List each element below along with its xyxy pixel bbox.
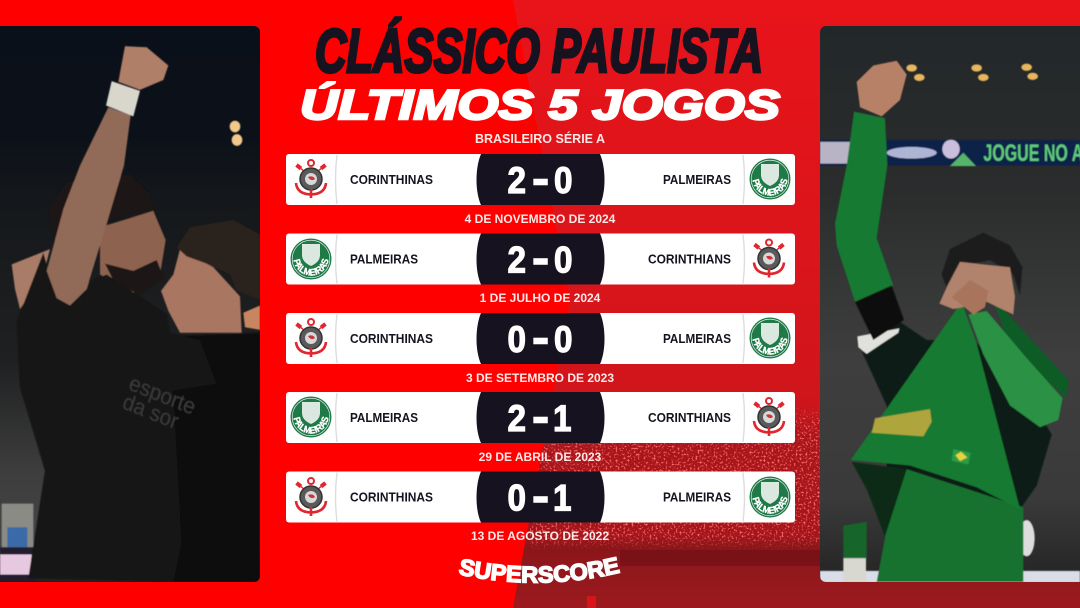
match row 3: PALMEIRAS — [663, 332, 731, 346]
match row 2: 2 — [508, 240, 526, 280]
fist — [857, 61, 907, 116]
match row 1: PALMEIRAS — [663, 173, 731, 187]
crest: Palmeiras: PALMEIRAS — [293, 258, 328, 276]
armband — [855, 285, 904, 340]
hand — [952, 280, 988, 315]
match row 5: – — [535, 488, 546, 510]
subtitle: Últimos 5 jogos: ÚLTIMOS 5 JOGOS — [300, 81, 780, 128]
match row 1: 2 — [508, 160, 526, 201]
raised arm — [835, 112, 893, 302]
advertising board — [0, 504, 37, 582]
jersey of player two — [170, 333, 260, 582]
left photo: Corinthians players — [0, 26, 260, 582]
score — [476, 234, 604, 284]
match row 5: CORINTHINAS — [350, 490, 433, 504]
player two face — [161, 249, 242, 333]
logo: Superscore: SUPERSCORE — [458, 556, 620, 584]
match row 2: – — [535, 250, 546, 272]
crest: Corinthians — [296, 160, 326, 198]
score — [476, 392, 604, 443]
date 2: 1 DE JULHO DE 2024 — [480, 291, 601, 305]
match row 3 — [286, 313, 795, 364]
crest: Palmeiras — [750, 318, 790, 358]
head hair — [942, 233, 1022, 295]
player one beard — [105, 260, 164, 295]
dark undershirt — [857, 322, 1052, 509]
match row 3: 0 — [554, 319, 572, 360]
match row 4 — [286, 392, 795, 443]
sponsor lettering — [123, 379, 195, 428]
player two hand — [243, 305, 260, 330]
match row 4: CORINTHIANS — [648, 411, 731, 425]
fist — [118, 46, 168, 90]
right arm — [968, 311, 1063, 427]
shirt right fold — [995, 306, 1069, 398]
player one jersey — [17, 253, 217, 582]
match row 5 — [286, 472, 795, 522]
score — [476, 154, 604, 205]
match row 5: PALMEIRAS — [663, 490, 731, 504]
crest: Palmeiras: PALMEIRAS — [293, 416, 328, 434]
wristband — [106, 81, 140, 116]
competition label: BRASILEIRO SÉRIE A — [475, 131, 605, 146]
match row 2: PALMEIRAS — [350, 252, 418, 266]
match row 1 — [286, 154, 795, 205]
stadium lights — [230, 121, 242, 146]
match row 4: 2 — [508, 398, 526, 439]
left hand on shoulder — [12, 249, 50, 309]
sponsor — [872, 409, 932, 436]
match row 1: 0 — [554, 160, 572, 201]
match row 4: 1 — [553, 398, 572, 439]
pulled shirt — [851, 302, 1020, 509]
white trim — [857, 328, 899, 354]
match row 5: 1 — [553, 478, 572, 518]
date 3: 3 DE SETEMBRO DE 2023 — [466, 371, 614, 385]
bottom board and background figures — [820, 520, 1080, 583]
face — [939, 262, 1015, 315]
match row 3: CORINTHINAS — [350, 332, 433, 346]
brazil patch — [952, 449, 971, 464]
match row 4: PALMEIRAS — [350, 411, 418, 425]
match row 4: – — [535, 408, 546, 430]
sponsor lettering: da sor — [120, 388, 182, 434]
player one hair — [54, 175, 154, 240]
crowd texture on lower right of background — [530, 405, 830, 608]
shirt shadow below hem — [852, 462, 907, 536]
date 5: 13 DE AGOSTO DE 2022 — [471, 529, 609, 543]
LED board — [820, 139, 1080, 166]
raised forearm — [47, 107, 131, 305]
crest: Palmeiras — [290, 238, 332, 280]
crest: Palmeiras: PALMEIRAS — [752, 178, 788, 196]
right photo: Palmeiras player — [820, 26, 1080, 583]
crest: Corinthians — [754, 240, 784, 278]
match row 3: – — [535, 330, 546, 352]
stadium lights — [906, 64, 1038, 81]
match row 1: – — [535, 170, 546, 192]
crest: Palmeiras — [750, 476, 790, 518]
crest: Palmeiras: PALMEIRAS — [752, 496, 788, 514]
title: Clássico Paulista: CLÁSSICO PAULISTA — [315, 17, 763, 85]
date 1: 4 DE NOVEMBRO DE 2024 — [465, 212, 616, 226]
score — [476, 472, 604, 522]
match row 2 — [286, 234, 795, 284]
player two hair — [177, 220, 260, 300]
crest: Palmeiras — [750, 158, 790, 200]
date 4: 29 DE ABRIL DE 2023 — [479, 450, 602, 464]
match row 1: CORINTHINAS — [350, 173, 433, 187]
crest: Corinthians — [296, 319, 326, 357]
score — [476, 313, 604, 364]
crest: Corinthians — [296, 478, 326, 516]
match row 5: 0 — [508, 478, 526, 518]
match row 2: CORINTHIANS — [648, 252, 731, 266]
crest: Palmeiras — [290, 396, 332, 438]
sponsor lettering: esporte — [126, 369, 199, 420]
player one face — [100, 211, 166, 293]
crest: Palmeiras: PALMEIRAS — [752, 338, 788, 355]
torso — [877, 469, 1023, 582]
crest: Corinthians — [754, 398, 784, 436]
match row 2: 0 — [554, 240, 572, 280]
match row 3: 0 — [508, 319, 526, 360]
